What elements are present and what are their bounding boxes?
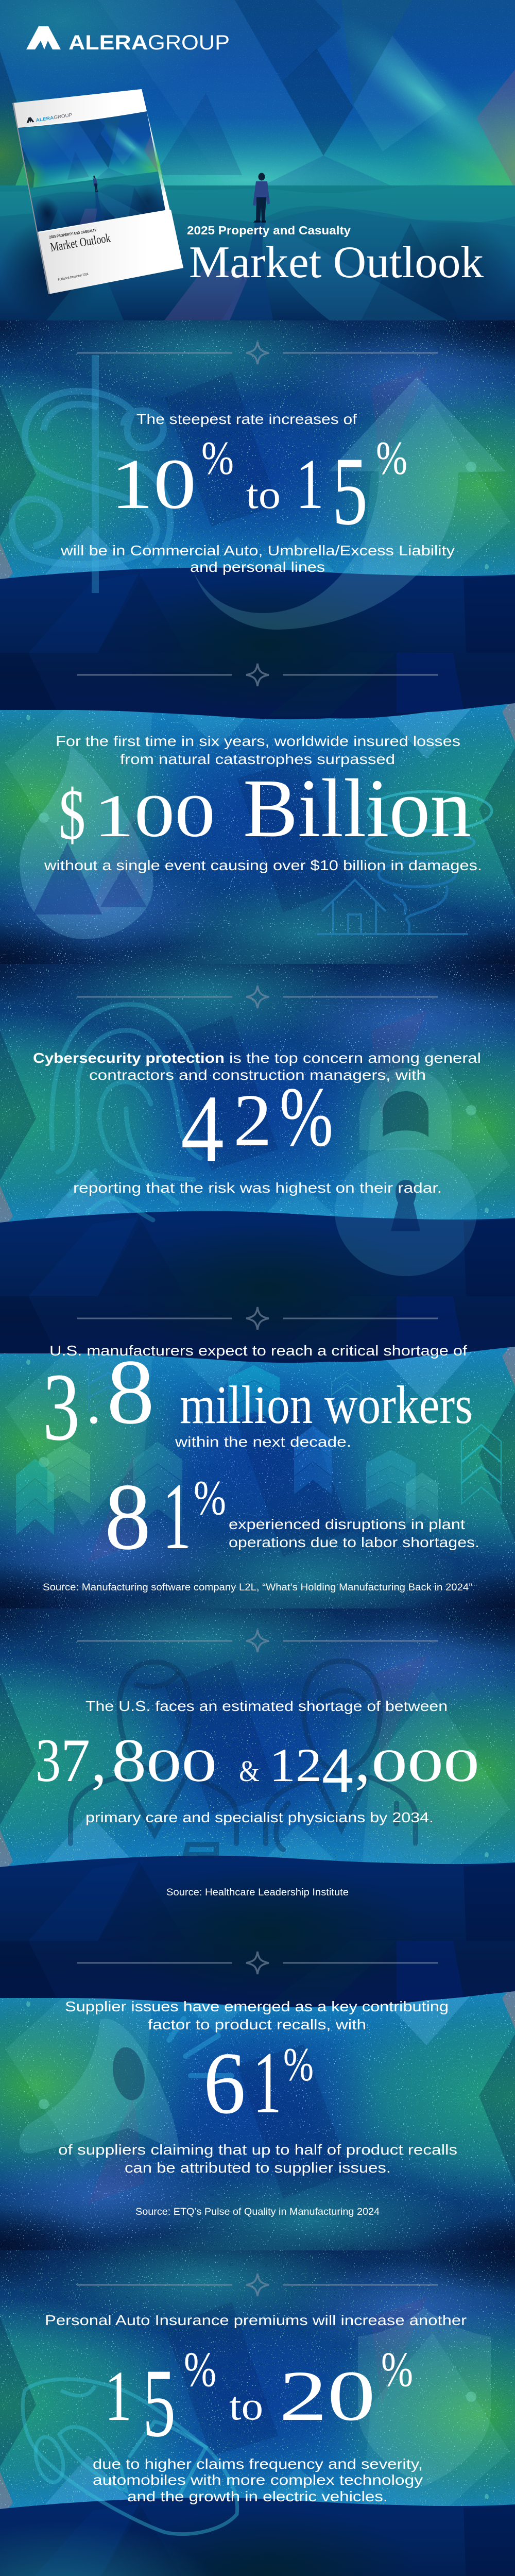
brochure cover mockup: ALERA — [36, 115, 54, 123]
icon: dollar sign — [12, 355, 170, 593]
stat: 10% to 15%: % — [376, 432, 407, 484]
stat: 81% — [105, 1464, 226, 1570]
stat: 37,800 & 124,000: , — [355, 1726, 370, 1794]
text: recalls detail: of suppliers claiming that up to half of product recalls — [58, 2142, 457, 2158]
panel: labor shortage — [16, 1341, 501, 1593]
stat: 42%: 2 — [233, 1079, 272, 1162]
stat: 3.8 million workers: 3 — [43, 1353, 80, 1461]
stat: 42% — [181, 1070, 333, 1182]
brochure cover mockup: GROUP — [54, 112, 73, 120]
icon: flame with trees — [20, 745, 153, 939]
stat: 37,800 & 124,000: 12 — [269, 1739, 322, 1791]
text: auto detail — [93, 2456, 423, 2504]
text: disruptions: operations due to labor shortages. — [229, 1534, 479, 1550]
panel: header — [0, 0, 515, 320]
stat: 61%: % — [283, 2038, 314, 2091]
text: labor intro: U.S. manufacturers expect to reach a critical shortage of — [49, 1343, 467, 1359]
stat: 3.8 million workers: . — [86, 1368, 101, 1436]
subtitle: 2025 Property and Casualty — [187, 224, 351, 237]
brochure cover mockup — [12, 89, 183, 294]
text: auto detail: due to higher claims frequency and severity, — [93, 2456, 423, 2472]
stat: 81%: 1 — [163, 1464, 191, 1569]
stat: 37,800 & 124,000: 4 — [322, 1735, 353, 1806]
text: cybersecurity intro: Cybersecurity protection — [33, 1050, 225, 1066]
source note: Source: Healthcare Leadership Institute — [166, 1887, 349, 1898]
icon: two doctors — [71, 1661, 416, 1855]
icon: fingerprint — [52, 1005, 200, 1220]
panel: personal auto — [23, 2308, 491, 2534]
stat: 37,800 & 124,000: 000 — [371, 1740, 479, 1791]
panel: natural catastrophes — [20, 733, 492, 939]
panel: product recalls — [20, 1998, 457, 2217]
stat: 37,800 & 124,000 — [36, 1726, 479, 1806]
text: recalls detail: can be attributed to supplier issues. — [125, 2160, 391, 2176]
icon: tornado and house — [317, 791, 492, 934]
text: cybersecurity detail: reporting that the risk was highest on their radar. — [73, 1180, 442, 1196]
text: physician intro: The U.S. faces an estimated shortage of between — [85, 1698, 448, 1714]
panel: physician shortage — [36, 1661, 479, 1898]
stat: 3.8 million workers: million workers — [180, 1375, 473, 1435]
stat: 37,800 & 124,000: 8 — [112, 1726, 146, 1794]
stat: 15% to 20%: % — [184, 2342, 216, 2397]
logo: Alera Group: ALERA — [68, 31, 148, 54]
text: cybersecurity intro — [33, 1050, 481, 1083]
text: catastrophe intro — [56, 733, 460, 767]
stat: 10% to 15%: 5 — [332, 437, 368, 546]
source note: Source: Manufacturing software company L2L, “What’s Holding Manufacturing Back in 2024” — [43, 1582, 472, 1593]
text: physician detail: primary care and specialist physicians by 2034. — [85, 1809, 434, 1825]
stat: 15% to 20%: 5 — [143, 2349, 176, 2458]
stat: 42%: % — [280, 1070, 333, 1164]
text: recalls detail — [58, 2142, 457, 2176]
stat: 81%: % — [194, 1470, 226, 1525]
stat: 37,800 & 124,000: 7 — [61, 1726, 90, 1794]
title: Market Outlook — [189, 238, 484, 287]
brochure cover mockup: 2025 PROPERTY AND CASUALTY — [49, 228, 97, 240]
icon: upward arrow — [194, 377, 506, 630]
text: rate detail: and personal lines — [190, 559, 325, 575]
stat: $100 Billion: 100 — [94, 782, 215, 850]
text: recalls intro: Supplier issues have emerged as a key contributing — [65, 1998, 449, 2014]
text: auto intro: Personal Auto Insurance premiums will increase another — [45, 2312, 467, 2328]
stat: 10% to 15%: 10 — [111, 445, 196, 524]
text: disruptions — [229, 1516, 479, 1550]
stat: 61%: 1 — [253, 2034, 282, 2132]
stat: 3.8 million workers: 8 — [107, 1341, 154, 1443]
panel: rate increases — [12, 355, 506, 630]
text: cybersecurity intro: is the top concern among general — [229, 1050, 481, 1066]
stat: 10% to 15%: 1 — [296, 445, 324, 524]
text: auto detail: and the growth in electric vehicles. — [127, 2488, 388, 2504]
stat: 3.8 million workers — [43, 1341, 473, 1461]
brochure cover mockup: Market Outlook — [49, 231, 111, 255]
text: rate detail — [60, 543, 455, 575]
stat: 42%: 4 — [181, 1075, 224, 1182]
icon: megaphone — [20, 2019, 232, 2154]
text: cybersecurity intro: contractors and construction managers, with — [89, 1067, 426, 1083]
text: auto detail: automobiles with more complex technology — [93, 2472, 423, 2488]
text: catastrophe intro: For the first time in six years, worldwide insured losses — [56, 733, 460, 749]
stat: 37,800 & 124,000: & — [239, 1754, 260, 1788]
stat: $100 Billion: $ — [59, 775, 85, 855]
text: recalls intro: factor to product recalls, with — [148, 2016, 366, 2032]
stat: $100 Billion — [59, 762, 471, 855]
stat: 37,800 & 124,000: 00 — [146, 1740, 217, 1791]
stat: 15% to 20%: to — [229, 2383, 263, 2428]
stat: $100 Billion: Billion — [243, 762, 471, 855]
text: catastrophe detail: without a single event causing over $10 billion in damages. — [44, 857, 482, 873]
icon: car — [23, 2379, 237, 2534]
stat: 61%: 6 — [203, 2035, 246, 2132]
stat: 37,800 & 124,000: 3 — [36, 1726, 61, 1794]
logo: Alera Group: GROUP — [148, 31, 230, 54]
stat: 10% to 15%: % — [201, 432, 234, 484]
text: labor timeframe: within the next decade. — [175, 1434, 351, 1450]
text: recalls intro — [65, 1998, 449, 2032]
panel: footer call to action — [0, 2531, 196, 2576]
stat: 61% — [203, 2034, 314, 2132]
stat: 81%: 8 — [105, 1464, 151, 1570]
text: catastrophe intro: from natural catastrophes surpassed — [120, 751, 395, 767]
icon: shield — [358, 2308, 491, 2486]
icon: padlock — [335, 1068, 477, 1276]
stat: 10% to 15%: to — [246, 472, 281, 517]
stat: 15% to 20% — [105, 2342, 413, 2458]
source note: Source: ETQ’s Pulse of Quality in Manufacturing 2024 — [135, 2207, 380, 2217]
panel: cybersecurity — [33, 1005, 481, 1276]
text: rate intro: The steepest rate increases of — [136, 411, 357, 427]
stat: 15% to 20%: % — [381, 2342, 413, 2397]
stat: 10% to 15% — [111, 432, 407, 546]
stat: 15% to 20%: 1 — [105, 2357, 132, 2436]
text: rate detail: will be in Commercial Auto, Umbrella/Excess Liability — [60, 543, 455, 558]
stat: 15% to 20%: 20 — [279, 2357, 375, 2436]
logo: Alera Group — [26, 26, 230, 54]
brochure cover mockup: Published December 2024 — [58, 273, 89, 282]
text: disruptions: experienced disruptions in plant — [229, 1516, 465, 1532]
stat: 37,800 & 124,000: , — [91, 1726, 107, 1794]
icon: upward chevrons — [16, 1359, 501, 1535]
